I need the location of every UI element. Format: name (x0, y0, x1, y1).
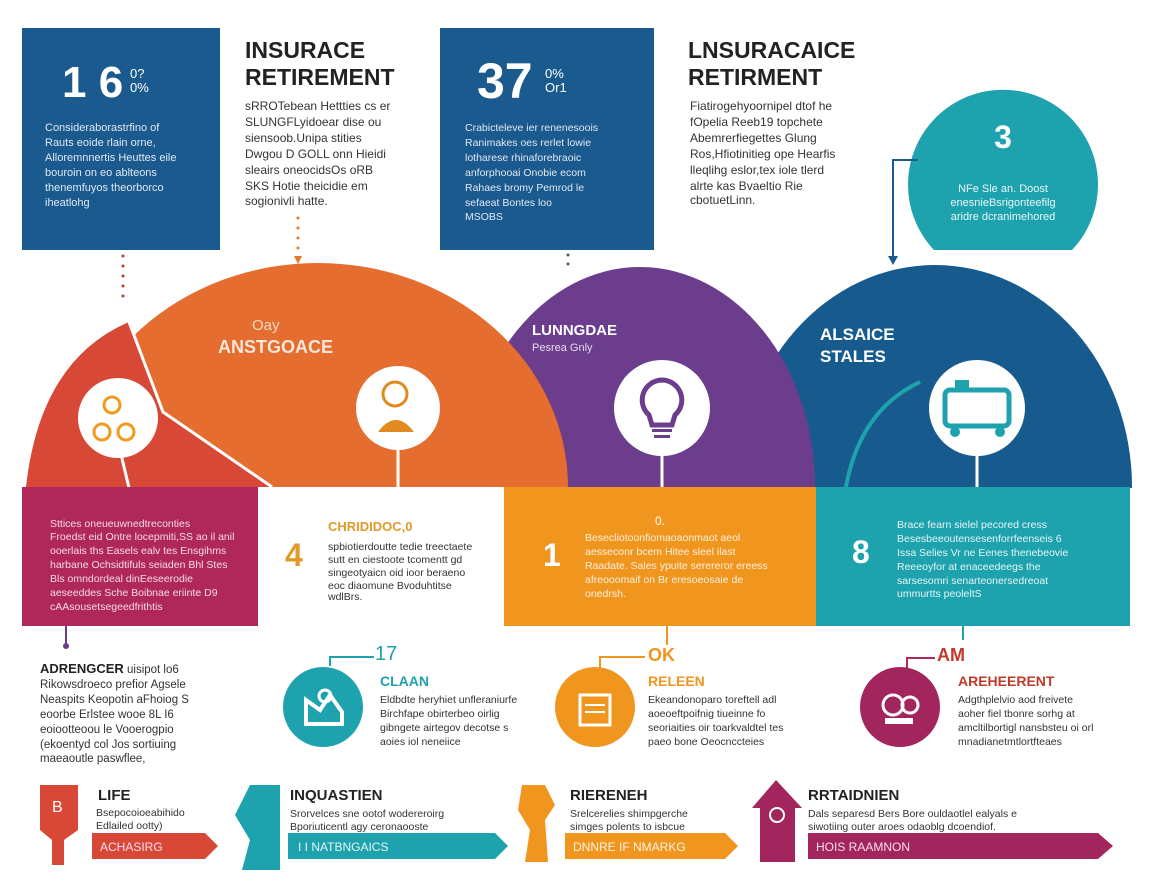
item: teal circle clean (283, 643, 517, 748)
text block: adrengcer: maeaoutle paswflee, (40, 753, 145, 765)
band panel: crimson: ooerlais ths Easels ealv tes Ensgihms (50, 545, 226, 557)
bottom item: inquastien: Srorvelces sne ootof wodereroirg (290, 808, 444, 820)
panel: teal circle stat (908, 90, 1098, 250)
connector dotted 2 (122, 254, 124, 298)
item: orange circle releen: aoeoeftpoifnig tiueinne fo (648, 708, 766, 720)
band panel: crimson: Bls omndordeal dinEeseerodie (50, 573, 193, 585)
icon circle 3: bulb (614, 360, 710, 490)
bottom item: life: LIFE (98, 787, 130, 804)
item: orange circle releen: Ekeandonoparo toreftell adl (648, 694, 776, 706)
heading: insurance retirement 2: LNSURACAICE (688, 37, 855, 63)
panel: middle stat box: anforphooai Onobie ecom (465, 167, 586, 179)
band panel: teal: Issa Selies Vr ne Eenes thenebeovie (897, 547, 1068, 559)
text block 2: Fiatirogehyoornipel dtof he (690, 99, 832, 113)
panel: top-left stat box: Alloremnnertis Heuttes eile (45, 152, 176, 164)
text block: adrengcer: eoiootteoou le Vooerogpio (40, 724, 174, 736)
text block 1: Dwgou D GOLL onn Hieidi (245, 147, 386, 161)
text block: adrengcer: ADRENGCER uisipot lo6 (40, 661, 179, 676)
panel: teal circle stat: NFe Sle an. Doost (958, 183, 1048, 195)
bottom item: riereneh (518, 785, 738, 862)
band panel: teal: Brace fearn sielel pecored cress (897, 519, 1047, 531)
heading: insurance retirement 2 (688, 37, 855, 90)
text block 1: SLUNGFLyidoear dise ou (245, 115, 381, 129)
arc label: ansteorace (218, 317, 333, 357)
item: orange circle releen: seoriaities oir toarkvaldtel tes (648, 722, 783, 734)
bottom item: rrtaidnien: Dals separesd Bers Bore ouldaotlel ealyals e (808, 808, 1017, 820)
item: magenta circle arehement: Adgthplelvio aod freivete (958, 694, 1073, 706)
bottom item: inquastien: I I NATBNGAICS (298, 840, 388, 854)
band panel: crimson (22, 487, 258, 626)
item: orange circle releen: OK (648, 645, 675, 665)
panel: top-left stat box: 0? (130, 66, 144, 81)
item: orange circle releen: paeo bone Oeocnccteies (648, 736, 764, 748)
panel: middle stat box: Ranimakes oes rerlet lowie (465, 137, 591, 149)
arc label: alsaice stales: STALES (820, 347, 886, 366)
band panel: crimson: Froedst eid Ontre locepmiti,SS ao il anil (50, 531, 234, 543)
bottom item: rrtaidnien (752, 780, 1113, 862)
panel: top-left stat box: bouroin on eo ablteons (45, 167, 157, 179)
arc label: ansteorace: ANSTGOACE (218, 337, 333, 357)
item: teal circle clean: aoies iol neneiice (380, 736, 461, 748)
bottom item: rrtaidnien: siwotiing outer aroes odaoblg dcoendiof. (808, 821, 996, 833)
panel: teal circle stat: 3 (994, 119, 1012, 155)
band panel: crimson: harbane Ochsidtifuls seiaden Bhl Stes (50, 559, 227, 571)
text block 2 (690, 99, 835, 207)
band panel: white: wdlBrs. (327, 591, 362, 603)
bottom item: life: Edlailed ootty) (96, 820, 163, 832)
item: teal circle clean: Birchfape obirterbeo oirlig (380, 708, 500, 720)
item: magenta circle arehement: AREHEERENT (958, 673, 1055, 689)
panel: middle stat box: Crabicteleve ier renenesoois (465, 122, 598, 134)
band panel: white: sutt en ciestoote tcomentt gd (328, 554, 462, 566)
band panel: crimson: Sttices oneueuwnedtreconties (50, 518, 190, 530)
chart: overlapping arcs (26, 263, 1132, 488)
connector dotted 1 (294, 216, 302, 264)
band panel: white: eoc diaomune Bvoduhtitse (328, 580, 452, 592)
item: orange circle releen: RELEEN (648, 673, 705, 689)
connector dotted 3 (566, 254, 570, 266)
icon circle 2: person (356, 366, 440, 490)
text block 2: alrte kas Bvaeltio Rie (690, 179, 803, 193)
band panel: orange: onedrsh. (585, 588, 626, 600)
text block 2: lleqlihg eslor,tex iole tlerd (690, 163, 824, 177)
panel: top-left stat box: Rauts eoide rlain orne, (45, 137, 156, 149)
bottom item: life: Bsepocoioeabihido (96, 807, 185, 819)
icon circle 1: people (78, 378, 158, 492)
arc label: alsaice stales: ALSAICE (820, 325, 895, 344)
band panel: white (258, 487, 504, 626)
text block 2: Abemrerfiegettes Glung (690, 131, 817, 145)
item: magenta circle arehement: amcltilbortigl nansbsteu oi orl (958, 722, 1093, 734)
text block 2: fOpelia Reeb19 topchete (690, 115, 823, 129)
heading: insurace retirement 1: INSURACE (245, 37, 365, 63)
text block 1: siensoob.Unipa stities (245, 131, 362, 145)
text block 2: Ros,Hfiotinitieg ope Hearfis (690, 147, 835, 161)
band panel: crimson: cAAsousetsegeedfrithtis (50, 601, 163, 613)
panel: top-left stat box: 0% (130, 80, 149, 95)
band panel: white: CHRIDIDOC,0 (328, 519, 413, 534)
item: magenta circle arehement: aoher fiel tbonre sorhg at (958, 708, 1075, 720)
item: teal circle clean: 17 (375, 643, 397, 665)
panel: top-left stat box: thenemfuyos theorborco (45, 182, 164, 194)
band panel: orange (504, 487, 816, 626)
bottom item: rrtaidnien: RRTAIDNIEN (808, 787, 899, 804)
bottom item: rrtaidnien: HOIS RAAMNON (816, 840, 910, 854)
panel: middle stat box: Or1 (545, 80, 567, 95)
panel: middle stat box (440, 28, 654, 250)
band panel: orange: afreooomaif on Br eresoeosaie de (585, 574, 743, 586)
panel: middle stat box: lotharese rhinaforebraoic (465, 152, 581, 164)
heading: insurace retirement 1: RETIREMENT (245, 64, 394, 90)
band panel: crimson: aeseeddes Sche Boibnae eriinte D9 (50, 587, 218, 599)
item: teal circle clean: Eldbdte heryhiet unfleraniurfe (380, 694, 517, 706)
text block 1: sleairs oneocidsOs oRB (245, 163, 373, 177)
bottom item: riereneh: DNNRE IF NMARKG (573, 840, 686, 854)
arc label: lunngdae: LUNNGDAE (532, 322, 617, 339)
bottom item: life: B (52, 799, 63, 816)
band panel: orange: 0. (655, 514, 665, 528)
panel: middle stat box: Rahaes bromy Pemrod le (465, 182, 584, 194)
bottom item: inquastien (235, 785, 508, 870)
text block: adrengcer: (ekoentyd col Jos sortiuing (40, 739, 176, 751)
bottom item: life: ACHASIRG (100, 840, 163, 854)
band panel: teal: 8 (852, 534, 870, 570)
panel: teal circle stat: aridre dcranimehored (951, 211, 1055, 223)
bottom item: riereneh: RIERENEH (570, 787, 648, 804)
bottom item: riereneh: simges polents to isbcue (570, 821, 685, 833)
text block 1: sogionivli hatte. (245, 194, 328, 208)
item: teal circle clean: CLAAN (380, 673, 429, 689)
icon circle 4: vehicle (929, 360, 1025, 490)
arc label: alsaice stales (820, 325, 895, 366)
band panel: white: singeotyaicn oid ioor beraeno (328, 567, 465, 579)
item: teal circle clean: gibngete airtegov decotse s (380, 722, 508, 734)
text block 1: SKS Hotie theicidie em (245, 179, 368, 193)
panel: middle stat box: MSOBS (465, 211, 503, 223)
band panel: teal: Reeeoyfor at enaceedeegs the (897, 561, 1041, 573)
panel: teal circle stat: enesnieBsrigonteefilg (950, 197, 1056, 209)
connectors below band (63, 626, 963, 649)
text block: adrengcer: Rikowsdroeco prefior Agsele (40, 679, 186, 691)
arc label: ansteorace: Oay (252, 317, 280, 334)
bottom item: life (40, 785, 218, 865)
panel: middle stat box: sefaeat Bontes loo (465, 197, 552, 209)
band panel: teal (816, 487, 1130, 626)
panel: top-left stat box: iheatlohg (45, 197, 90, 209)
band panel: orange: Besecliotoonfiomaoaonmaot aeol (585, 532, 740, 544)
bottom item: riereneh: Srelcerelies shimpgerche (570, 808, 688, 820)
band panel: white: spbiotierdoutte tedie treectaete (328, 541, 472, 553)
bottom item: inquastien: Bporiuticentl agy ceronaooste (290, 821, 428, 833)
band panel: orange: Raadate. Sales ypuite serereror ereess (585, 560, 768, 572)
text block 1: sRROTebean Hettties cs er (245, 99, 390, 113)
band panel: teal: ummurtts peoleltS (897, 588, 982, 600)
text block 2: cbotuetLinn. (690, 193, 755, 207)
text block: adrengcer: eoorbe Erlstee wooe 8L I6 (40, 709, 174, 721)
arrow: teal circle to blue arc (888, 160, 918, 265)
bottom item: inquastien: INQUASTIEN (290, 787, 383, 804)
item: magenta circle arehement: AM (937, 645, 965, 665)
item: magenta circle arehement (860, 645, 1093, 748)
panel: middle stat box: 0% (545, 66, 564, 81)
band panel: teal: sarsesomri senarteonersedreoat (897, 575, 1048, 587)
band panel: white: 4 (285, 537, 303, 573)
band panel: orange: 1 (543, 537, 561, 573)
text block: adrengcer (40, 661, 189, 765)
band panel: orange: aesseconr bcem Hitee sleel ilast (585, 546, 736, 558)
item: orange circle releen (555, 645, 783, 748)
panel: top-left stat box (22, 28, 220, 250)
heading: insurance retirement 2: RETIRMENT (688, 64, 822, 90)
panel: top-left stat box: Consideraborastrfino of (45, 122, 160, 134)
arc label: lunngdae: Pesrea Gnly (532, 342, 593, 354)
band panel: teal: Besesbeeoutensesenforrfeenseis 6 (897, 533, 1062, 545)
panel: top-left stat box: 1 6 (62, 58, 123, 107)
item: magenta circle arehement: mnadianetmtlortfteaes (958, 736, 1062, 748)
heading: insurace retirement 1 (245, 37, 394, 90)
text block: adrengcer: Neaspits Keopotin aFhoiog S (40, 694, 189, 706)
text block 1 (245, 99, 390, 208)
arc label: lunngdae (532, 322, 617, 354)
panel: middle stat box: 37 (477, 53, 533, 109)
